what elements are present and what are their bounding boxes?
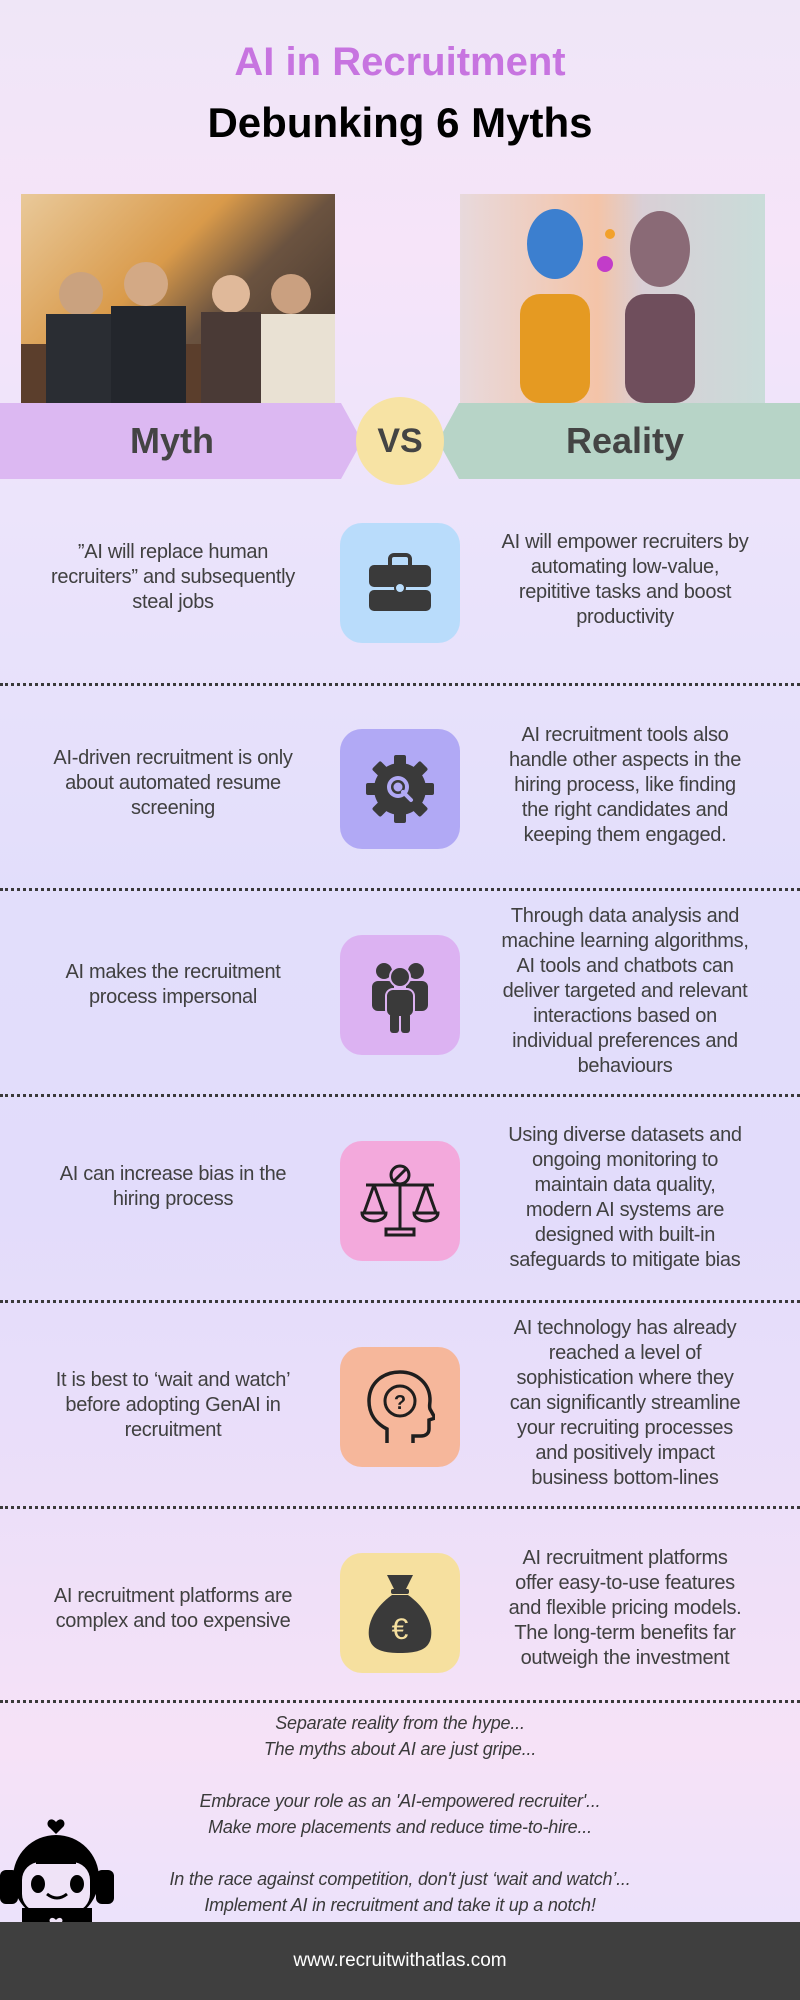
row 2 myth	[53, 747, 293, 819]
row 6 reality	[509, 1547, 741, 1669]
row 5 reality: business bottom-lines	[531, 1467, 719, 1489]
closing poem: The myths about AI are just gripe...	[264, 1739, 536, 1759]
row 1 reality: repititive tasks and boost	[519, 581, 731, 603]
banner: Myth: Myth	[130, 420, 214, 461]
row 1 myth: steal jobs	[132, 591, 214, 613]
row 6 reality: outweigh the investment	[521, 1647, 729, 1669]
row 2 myth: AI-driven recruitment is only	[53, 747, 293, 769]
row 5 reality	[510, 1317, 740, 1489]
image: recruiters meeting	[21, 194, 335, 403]
subtitle: Debunking 6 Myths	[207, 99, 593, 146]
row 2 reality: keeping them engaged.	[524, 824, 726, 846]
row 3 myth: process impersonal	[89, 986, 257, 1008]
closing poem: Implement AI in recruitment and take it up a notch!	[204, 1895, 596, 1915]
row 2 reality: handle other aspects in the	[509, 749, 741, 771]
row 6 myth: complex and too expensive	[56, 1610, 290, 1632]
row 4 myth: hiring process	[113, 1188, 233, 1210]
row 4 reality: modern AI systems are	[526, 1199, 724, 1221]
icon: group of people	[340, 935, 460, 1055]
icon: scales with ban sign	[340, 1141, 460, 1261]
closing poem	[169, 1713, 631, 1915]
closing poem: Embrace your role as an 'AI-empowered recruiter'...	[200, 1791, 600, 1811]
row 5 reality: reached a level of	[549, 1342, 701, 1364]
row 6 reality: The long-term benefits far	[514, 1622, 736, 1644]
row 4 reality: designed with built-in	[535, 1224, 715, 1246]
closing poem: Separate reality from the hype...	[275, 1713, 525, 1733]
row 2 myth: about automated resume	[65, 772, 281, 794]
row 3 reality: interactions based on	[533, 1005, 717, 1027]
row 1 myth: recruiters” and subsequently	[51, 566, 295, 588]
row 1 myth	[51, 541, 296, 613]
row 3 reality: deliver targeted and relevant	[503, 980, 747, 1002]
row 5 myth: before adopting GenAI in	[65, 1394, 281, 1416]
VS circle	[356, 397, 444, 485]
row 2 reality: AI recruitment tools also	[521, 724, 729, 746]
image: AI robots	[460, 194, 765, 403]
row 5 reality: can significantly streamline	[510, 1392, 740, 1414]
footer bar	[0, 1922, 800, 2000]
row 2 reality	[509, 724, 741, 846]
icon: briefcase	[340, 523, 460, 643]
icon: head with question mark	[340, 1347, 460, 1467]
icon: robot mascot	[0, 1819, 114, 1922]
row 3 myth	[65, 961, 281, 1008]
row 4 reality: Using diverse datasets and	[508, 1124, 742, 1146]
closing poem: Make more placements and reduce time-to-hire...	[208, 1817, 592, 1837]
row 6 myth: AI recruitment platforms are	[54, 1585, 292, 1607]
row 6 myth	[54, 1585, 292, 1632]
VS circle: VS	[377, 422, 423, 460]
row 5 reality: sophistication where they	[516, 1367, 734, 1389]
icon: head with question mark: ?	[394, 1392, 406, 1414]
row 5 reality: AI technology has already	[514, 1317, 736, 1339]
row 3 reality: Through data analysis and	[511, 905, 739, 927]
row 3 reality: behaviours	[578, 1055, 672, 1077]
row 3 myth: AI makes the recruitment	[65, 961, 281, 983]
icon: gear search	[340, 729, 460, 849]
icon: money bag euro	[340, 1553, 460, 1673]
row 1 myth: ”AI will replace human	[78, 541, 268, 563]
row 2 reality: hiring process, like finding	[514, 774, 736, 796]
row 5 myth: It is best to ‘wait and watch’	[56, 1369, 290, 1391]
row 4 reality: safeguards to mitigate bias	[510, 1249, 740, 1271]
row 6 reality: AI recruitment platforms	[522, 1547, 728, 1569]
row 6 reality: offer easy-to-use features	[515, 1572, 735, 1594]
row 1 reality: productivity	[576, 606, 674, 628]
row 3 reality: individual preferences and	[512, 1030, 738, 1052]
row 2 myth: screening	[131, 797, 215, 819]
title: AI in Recruitment	[234, 40, 566, 84]
row 1 reality: AI will empower recruiters by	[502, 531, 748, 553]
row 4 myth: AI can increase bias in the	[60, 1163, 286, 1185]
row 4 reality: ongoing monitoring to	[532, 1149, 718, 1171]
banner: Myth	[0, 403, 362, 479]
row 5 reality: and positively impact	[535, 1442, 715, 1464]
row 3 reality: machine learning algorithms,	[501, 930, 749, 952]
row 5 myth	[56, 1369, 290, 1441]
row 4 reality: maintain data quality,	[535, 1174, 715, 1196]
row 2 reality: the right candidates and	[522, 799, 728, 821]
row 3 reality: AI tools and chatbots can	[516, 955, 734, 977]
banner: Reality	[438, 403, 800, 479]
row 4 myth	[60, 1163, 286, 1210]
row 3 reality	[501, 905, 749, 1077]
closing poem: In the race against competition, don't just ‘wait and watch’...	[169, 1869, 631, 1889]
icon: money bag euro: €	[392, 1613, 409, 1646]
row 1 reality: automating low-value,	[531, 556, 719, 578]
row 5 myth: recruitment	[125, 1419, 221, 1441]
row 1 reality	[502, 531, 749, 628]
row 4 reality	[508, 1124, 742, 1271]
banner: Reality: Reality	[566, 420, 684, 461]
row 6 reality: and flexible pricing models.	[509, 1597, 741, 1619]
footer bar: www.recruitwithatlas.com	[293, 1950, 507, 1971]
row 5 reality: your recruiting processes	[517, 1417, 733, 1439]
